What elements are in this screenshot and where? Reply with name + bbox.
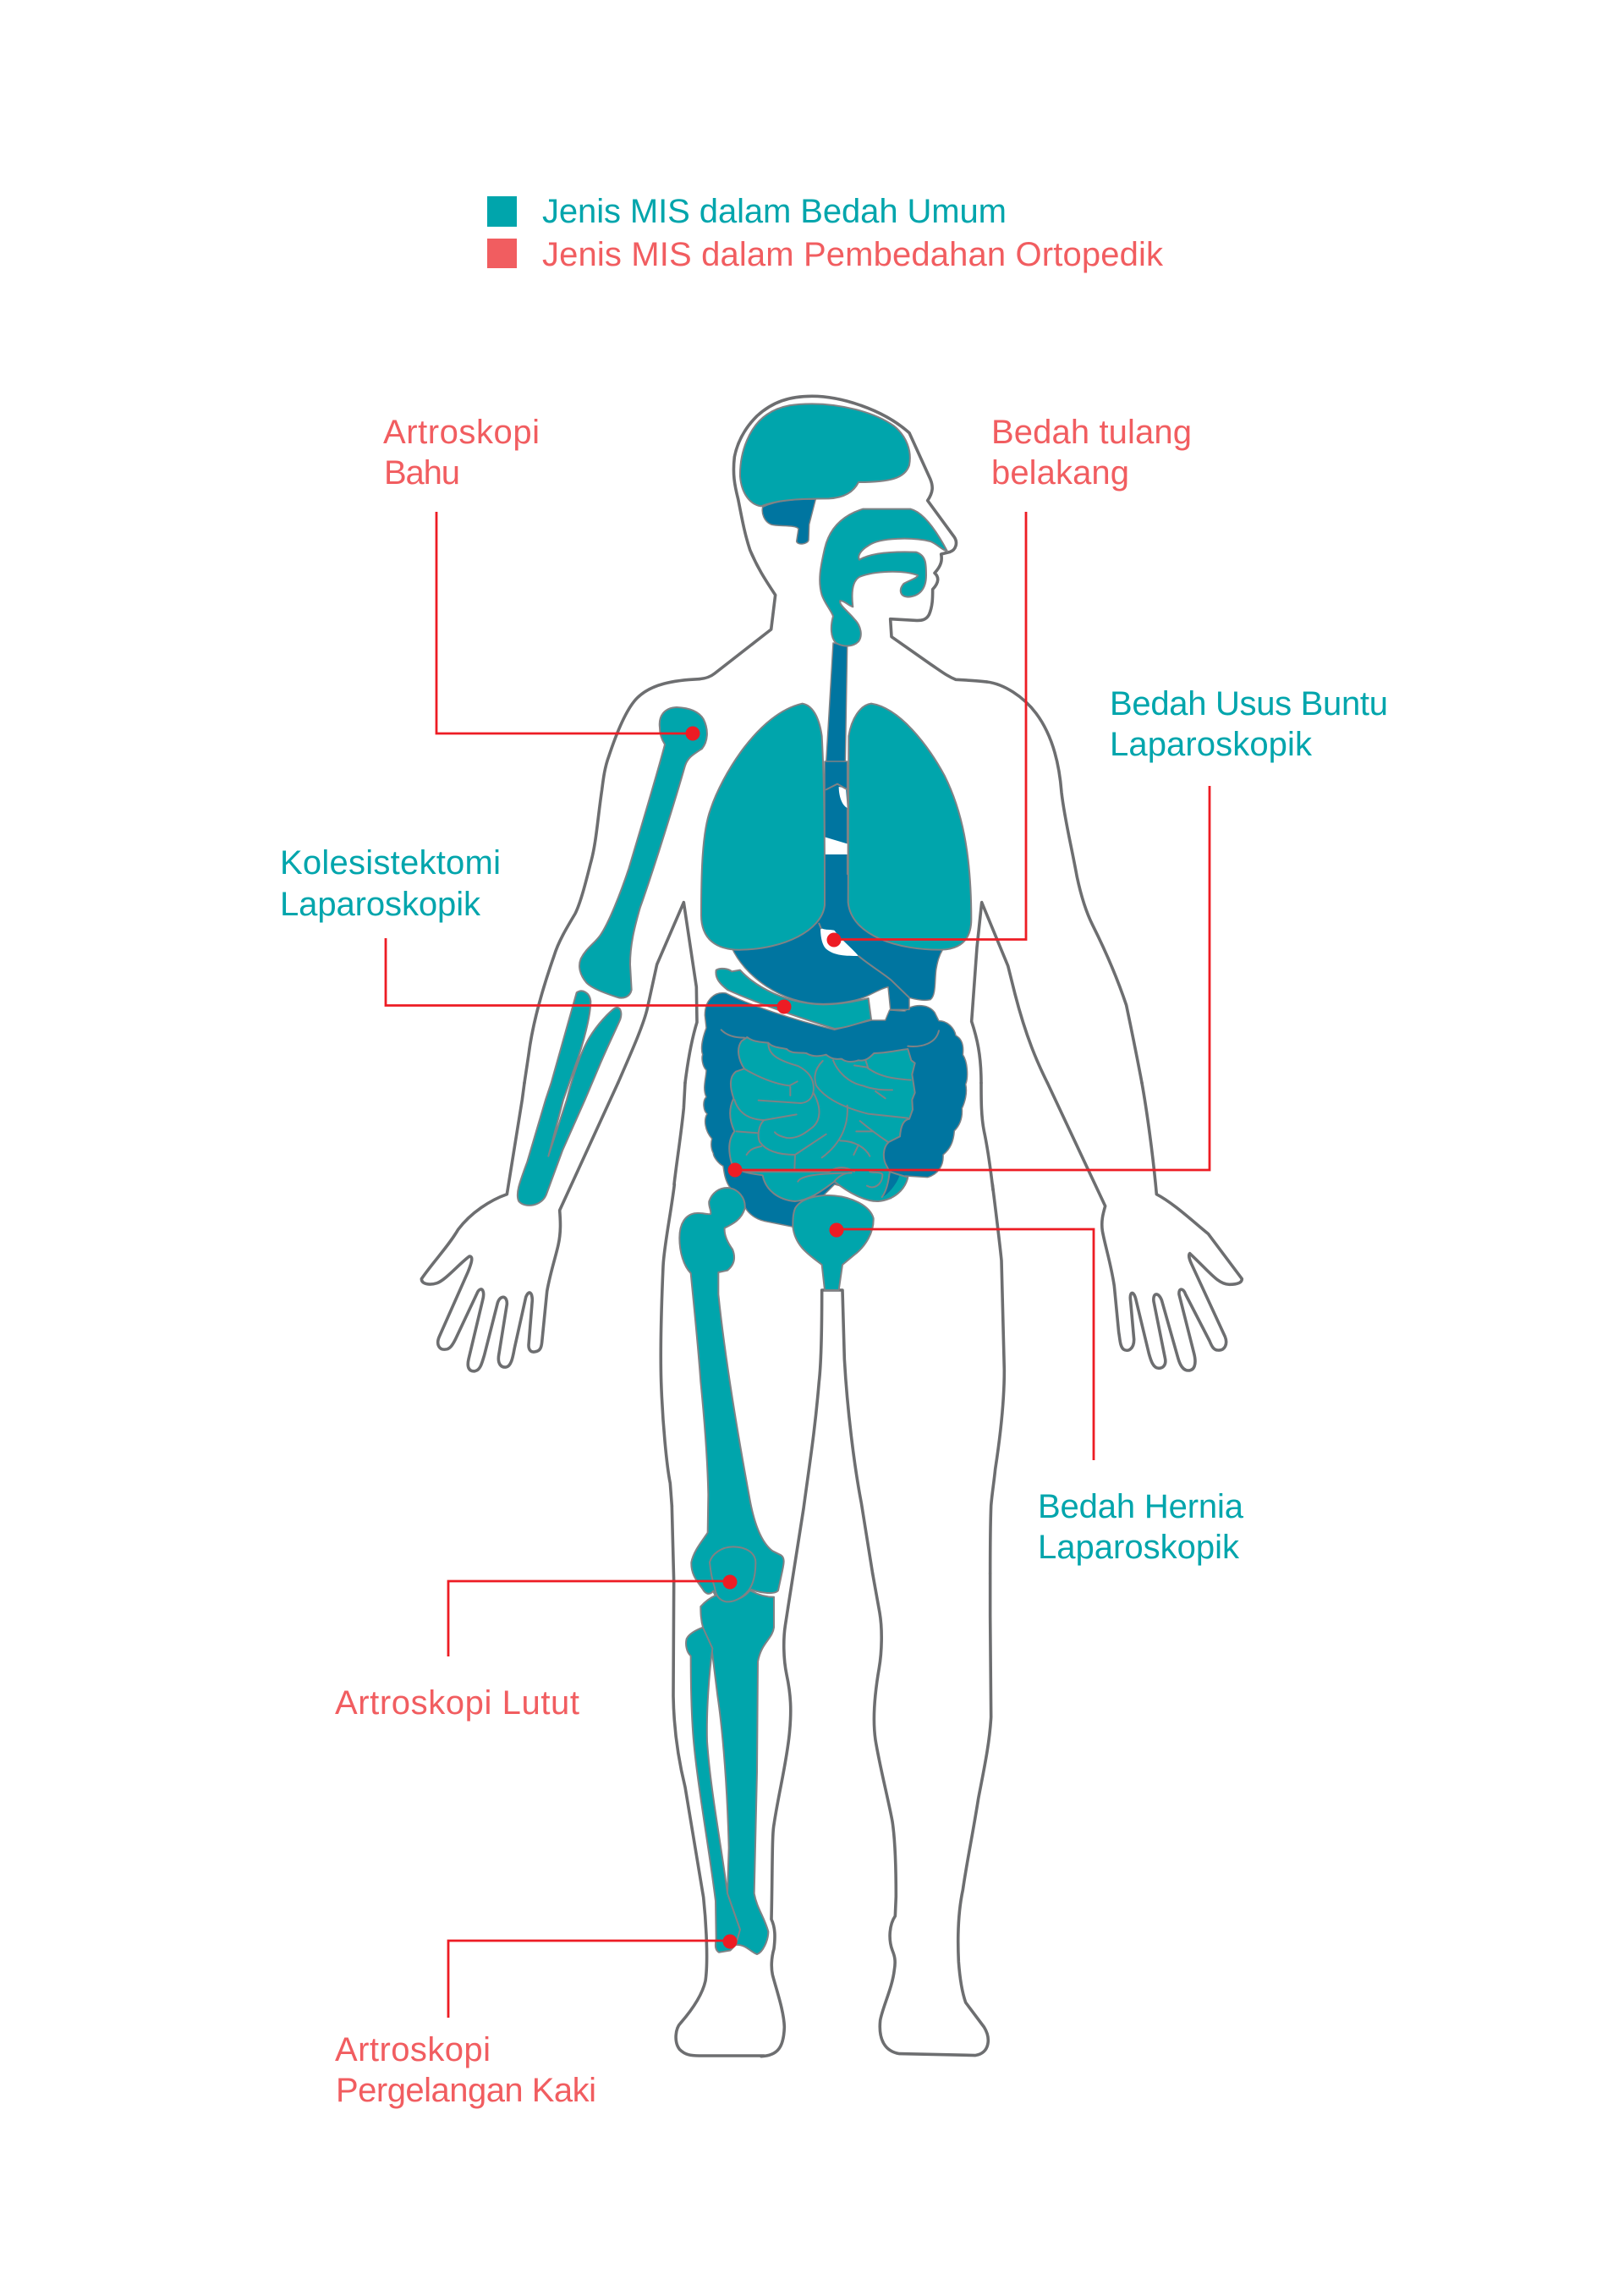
legend swatch: general surgery [487,196,517,227]
callout: Artroskopi Pergelangan Kaki: Artroskopi [335,2031,491,2068]
humerus [579,707,707,998]
legend swatch: orthopedic surgery [487,239,517,268]
callout: Artroskopi Lutut: Artroskopi Lutut [335,1684,579,1722]
pancreas [716,969,871,1029]
organs: brain and cerebellum [740,404,910,544]
callout: Bedah Hernia Laparoskopik [829,1223,1244,1566]
femur [679,1188,784,1601]
brain [740,404,910,506]
legend label: general surgery: Jenis MIS dalam Bedah Umum [542,193,1007,230]
large intestine [702,993,968,1227]
legend [487,193,1164,273]
callout: Bedah Usus Buntu Laparoskopik [727,685,1388,1178]
cerebellum [762,499,815,544]
callout: Bedah tulang belakang: belakang [991,454,1129,492]
callout: Kolesistektomi Laparoskopik [280,844,792,1013]
callout: Artroskopi Bahu [383,414,700,741]
callout: Bedah tulang belakang: Bedah tulang [991,414,1192,451]
callout: Artroskopi Pergelangan Kaki [335,1934,738,2109]
right lung [848,704,971,950]
lungs [701,704,971,950]
ulna and radius [518,991,621,1206]
callout: Bedah Usus Buntu Laparoskopik: Bedah Usus Buntu [1110,685,1388,722]
callout: Bedah Hernia Laparoskopik: Laparoskopik [1038,1529,1240,1566]
left lung [701,704,825,950]
bladder [793,1195,874,1290]
callout: Artroskopi Lutut [335,1575,738,1722]
callout: Bedah tulang belakang [827,414,1192,948]
callout: Artroskopi Pergelangan Kaki: Pergelangan Kaki [336,2072,596,2109]
legend label: orthopedic surgery: Jenis MIS dalam Pembedahan Ortopedik [542,236,1164,273]
callout: Bedah Hernia Laparoskopik: Bedah Hernia [1038,1488,1244,1525]
fibula [686,1628,740,1953]
tibia [700,1590,774,1954]
body outline [421,396,1242,2057]
nasal cavity and throat [820,509,947,646]
liver and stomach [732,761,943,1009]
small intestine [721,1030,939,1201]
esophagus and trachea [823,643,848,795]
tibia and fibula [686,1590,774,1954]
mediastinum gaps [820,787,859,956]
callout: Kolesistektomi Laparoskopik: Laparoskopik [280,886,481,923]
femur and knee [679,1188,784,1601]
callout: Artroskopi Bahu: Bahu [384,454,460,492]
callout: Bedah Usus Buntu Laparoskopik: Laparoskopik [1110,726,1313,763]
patella [710,1546,755,1601]
callout: Artroskopi Bahu: Artroskopi [383,414,540,451]
callout: Kolesistektomi Laparoskopik: Kolesistektomi [280,844,501,882]
